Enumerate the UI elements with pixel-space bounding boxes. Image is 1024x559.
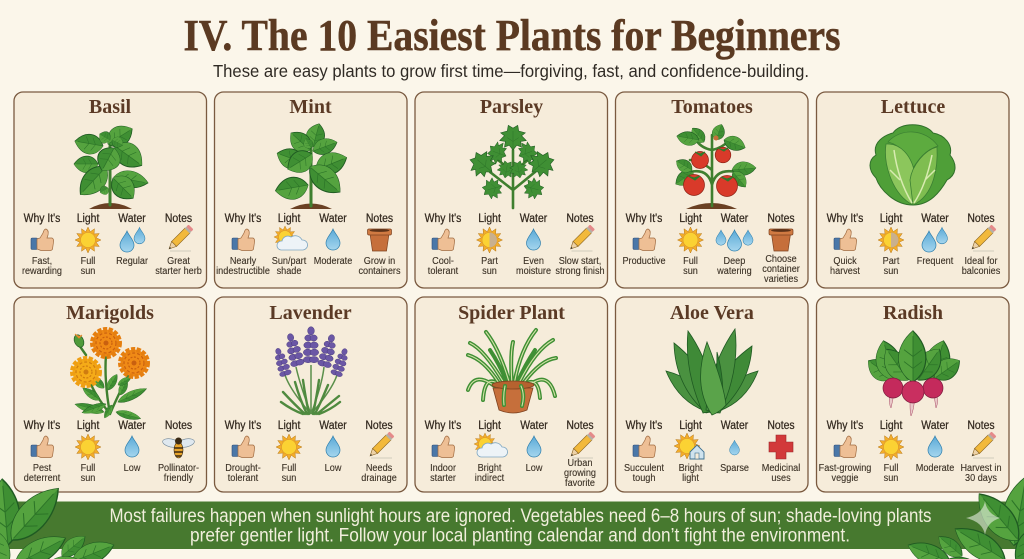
column: Notes	[564, 419, 596, 489]
column: Light	[878, 212, 904, 277]
column: Notes	[358, 212, 401, 277]
panel: Parsley	[415, 92, 608, 288]
column: Water: Water	[921, 419, 949, 432]
column: Light: Light	[679, 212, 703, 225]
column: Water	[319, 419, 347, 474]
column: Why It's: tolerant	[428, 265, 458, 277]
column: Water: Water	[520, 212, 547, 225]
icon: drop	[527, 436, 541, 457]
column: Water	[716, 212, 753, 277]
panel: Radish	[816, 297, 1009, 492]
column: Why It's: Indoor	[430, 462, 456, 474]
column: Notes	[960, 419, 1002, 484]
column: Light	[678, 212, 704, 277]
icon: red cross	[769, 435, 793, 459]
column: Light: Light	[77, 419, 100, 432]
panel: Mint	[214, 92, 407, 288]
column: Notes: containers	[358, 265, 401, 277]
column: Light: Light	[679, 419, 703, 432]
column: Light: Light	[278, 212, 301, 225]
column: Water: Water	[721, 419, 748, 432]
column: Water: Water	[118, 212, 146, 225]
column: Water: Even	[523, 255, 544, 267]
column: Notes	[155, 212, 202, 277]
column: Why It's: Why It's	[225, 419, 262, 432]
column: Why It's: tough	[633, 472, 655, 484]
column: Notes: friendly	[164, 472, 193, 484]
column: Light: Full	[683, 255, 698, 267]
icon: bee	[162, 437, 195, 458]
column: Water	[916, 419, 955, 474]
corner leaves: left	[0, 478, 117, 559]
heading: Aloe Vera: Aloe Vera	[670, 302, 754, 324]
icon: small drop	[730, 440, 739, 455]
heading: Mint: Mint	[289, 96, 332, 118]
icon: sun	[75, 434, 101, 460]
column: Why It's: Fast,	[32, 255, 52, 267]
column: Notes	[361, 419, 397, 484]
icon: thumbs up	[232, 229, 255, 250]
column: Water: Deep	[724, 255, 745, 267]
icon: thumbs up	[633, 436, 656, 458]
plant: radish	[863, 331, 965, 416]
column: Light: Part	[481, 255, 498, 267]
column: Notes: Choose	[765, 253, 797, 265]
column: Notes: Notes	[365, 419, 393, 432]
column: Water	[314, 212, 353, 267]
column: Why It's: Why It's	[24, 419, 61, 432]
title: IV. The 10 Easiest Plants for Beginners	[184, 11, 840, 60]
column: Water: Low	[526, 462, 543, 474]
icon: sun	[276, 434, 302, 460]
column: Notes: growing	[564, 467, 596, 479]
column: Why It's: Cool-	[432, 255, 454, 267]
column: Light: Light	[77, 212, 100, 225]
icon: sun	[678, 227, 704, 253]
column: Why It's: deterrent	[24, 472, 61, 484]
icon: pot	[368, 229, 392, 251]
column: Water	[516, 212, 552, 277]
column: Why It's: indestructible	[216, 265, 270, 277]
column: Notes: Medicinal	[762, 462, 800, 474]
subtitle: These are easy plants to grow first time—forgiving, fast, and confidence-building.	[213, 61, 809, 81]
column: Notes: Notes	[165, 212, 192, 225]
icon: pencil	[167, 225, 193, 251]
column: Light	[75, 419, 101, 484]
column: Notes: Notes	[767, 212, 795, 225]
column: Why It's: tolerant	[228, 472, 258, 484]
heading: Spider Plant: Spider Plant	[458, 302, 565, 324]
column: Why It's	[22, 212, 62, 277]
column: Light: sun	[482, 265, 497, 277]
column: Why It's: Why It's	[626, 419, 663, 432]
icon: two drops	[922, 227, 947, 252]
panel: Basil	[14, 92, 206, 288]
icon: sun	[75, 227, 101, 253]
icon: part sun	[476, 227, 502, 253]
column: Light: sun	[81, 472, 95, 484]
column: Light	[674, 419, 704, 484]
column: Water: watering	[716, 265, 752, 277]
column: Light: Light	[478, 212, 502, 225]
plant: aloe vera	[666, 329, 758, 415]
column: Water: Sparse	[720, 462, 749, 474]
column: Notes: Notes	[566, 419, 594, 432]
icon: drop	[326, 436, 340, 457]
column: Light: light	[682, 472, 699, 484]
panel: Aloe Vera	[616, 297, 808, 492]
icon: pencil	[970, 225, 996, 251]
icon: three drops	[716, 230, 753, 251]
column: Notes: favorite	[565, 477, 595, 489]
column: Notes: Harvest in	[960, 462, 1002, 474]
column: Notes: uses	[771, 472, 791, 484]
column: Light: Full	[81, 462, 95, 474]
column: Notes: 30 days	[965, 472, 997, 484]
column: Why It's: Why It's	[827, 419, 864, 432]
column: Notes	[555, 212, 605, 277]
panel: Lavender	[214, 297, 407, 492]
column: Notes: drainage	[361, 472, 397, 484]
column: Notes	[962, 212, 1000, 277]
icon: part sun	[878, 227, 904, 253]
column: Water: Regular	[116, 255, 149, 267]
column: Why It's: starter	[430, 472, 457, 484]
column: Why It's	[425, 212, 462, 277]
column: Notes	[762, 419, 800, 484]
column: Why It's: Why It's	[626, 212, 663, 225]
heading: Lettuce: Lettuce	[881, 96, 945, 118]
icon: pencil	[368, 432, 394, 458]
panel: Spider Plant	[415, 297, 608, 492]
heading: Marigolds: Marigolds	[66, 302, 154, 324]
column: Why It's	[819, 419, 871, 484]
column: Why It's: Why It's	[827, 212, 864, 225]
panel: Lettuce	[816, 92, 1009, 288]
column: Why It's: harvest	[830, 265, 860, 277]
icon: pot	[769, 229, 793, 251]
panel: Tomatoes	[616, 92, 808, 288]
icon: sun	[878, 434, 904, 460]
column: Why It's	[624, 419, 664, 484]
icon: thumbs up	[633, 229, 656, 250]
column: Why It's	[425, 419, 462, 484]
icon: thumbs up	[232, 436, 255, 458]
icon: drop	[125, 436, 139, 457]
column: Water	[720, 419, 749, 474]
column: Why It's: veggie	[832, 472, 859, 484]
column: Light	[476, 212, 502, 277]
column: Light: Full	[81, 255, 95, 267]
column: Light: Sun/part	[272, 255, 306, 267]
icon: thumbs up	[432, 436, 455, 458]
icon: sun and cloud	[274, 226, 308, 250]
sparkle	[966, 501, 1000, 535]
column: Why It's: Fast-growing	[819, 462, 871, 474]
column: Water: Water	[721, 212, 748, 225]
icon: two drops	[120, 227, 145, 252]
column: Water: Low	[325, 462, 342, 474]
column: Why It's	[24, 419, 61, 484]
plant: lettuce	[870, 125, 955, 205]
column: Light: sun	[81, 265, 95, 277]
column: Light: sun	[884, 472, 898, 484]
column: Why It's: Productive	[622, 255, 666, 267]
column: Notes: balconies	[962, 265, 1000, 277]
heading: Parsley: Parsley	[480, 96, 543, 118]
column: Light: Light	[478, 419, 502, 432]
plant: mint	[274, 121, 350, 209]
column: Notes: Needs	[366, 462, 392, 474]
banner text: Most failures happen when sunlight hours are ignored. Vegetables need 6–8 hours of sun; shade-loving plants	[110, 506, 932, 527]
icon: thumbs up	[834, 229, 857, 250]
column: Light	[75, 212, 101, 277]
column: Notes: Notes	[566, 212, 594, 225]
column: Light: Bright	[478, 462, 501, 474]
column: Light: Full	[282, 462, 296, 474]
column: Notes: Urban	[568, 457, 592, 469]
plant: marigolds	[72, 330, 148, 422]
column: Notes: Slow start,	[559, 255, 601, 267]
column: Notes: varieties	[764, 273, 798, 285]
column: Light: Light	[278, 419, 301, 432]
column: Water: moisture	[516, 265, 552, 277]
column: Why It's: Why It's	[425, 212, 462, 225]
heading: Radish: Radish	[883, 302, 943, 324]
plant: parsley	[465, 125, 559, 208]
column: Why It's: Succulent	[624, 462, 664, 474]
heading: Lavender: Lavender	[269, 302, 352, 324]
column: Notes: Notes	[165, 419, 192, 432]
icon: pencil	[568, 225, 595, 251]
icon: drop	[928, 436, 942, 457]
column: Why It's: Why It's	[24, 212, 61, 225]
column: Why It's	[827, 212, 864, 277]
column: Light: Light	[880, 212, 903, 225]
column: Water: Moderate	[916, 462, 955, 474]
column: Light: sun	[884, 265, 898, 277]
column: Notes: Notes	[967, 212, 995, 225]
column: Why It's: rewarding	[22, 265, 62, 277]
column: Light: shade	[277, 265, 302, 277]
column: Water	[917, 212, 954, 267]
column: Why It's: Why It's	[425, 419, 462, 432]
column: Light	[878, 419, 904, 484]
column: Water: Water	[118, 419, 146, 432]
column: Why It's	[622, 212, 666, 267]
column: Water: Moderate	[314, 255, 353, 267]
panel: Marigolds	[14, 297, 206, 492]
column: Light	[474, 419, 508, 484]
column: Light: sun	[683, 265, 698, 277]
heading: Tomatoes: Tomatoes	[671, 96, 753, 118]
column: Light	[272, 212, 308, 277]
banner text: prefer gentler light. Follow your local planting calendar and don’t fight the environment.	[190, 526, 850, 546]
column: Notes: Great	[167, 255, 190, 267]
column: Light: indirect	[475, 472, 504, 484]
column: Water: Water	[319, 419, 347, 432]
icon: pencil	[569, 432, 595, 458]
column: Water	[118, 419, 146, 474]
column: Notes: Pollinator-	[158, 462, 199, 474]
plant: basil	[73, 120, 149, 209]
plant: spider plant	[468, 330, 556, 413]
column: Why It's	[216, 212, 270, 277]
icon: thumbs up	[31, 436, 54, 458]
column: Light: Bright	[679, 462, 702, 474]
icon: thumbs up	[834, 436, 857, 458]
column: Notes: container	[762, 263, 800, 275]
column: Notes: starter herb	[155, 265, 202, 277]
column: Light: Full	[884, 462, 898, 474]
column: Water: Low	[124, 462, 141, 474]
plant: lavender	[272, 327, 351, 414]
plant: tomatoes	[672, 122, 756, 209]
column: Notes: Notes	[967, 419, 995, 432]
corner leaves: right	[904, 474, 1024, 559]
heading: Basil: Basil	[89, 96, 132, 118]
column: Notes: strong finish	[555, 265, 605, 277]
icon: thumbs up	[432, 229, 455, 250]
column: Notes: Notes	[767, 419, 795, 432]
column: Notes: Ideal for	[965, 255, 997, 267]
column: Notes: Notes	[366, 212, 393, 225]
column: Water: Frequent	[917, 255, 954, 267]
column: Why It's: Nearly	[230, 255, 256, 267]
icon: sun and house	[674, 433, 704, 459]
column: Why It's: Quick	[833, 255, 857, 267]
column: Notes	[762, 212, 800, 285]
column: Why It's	[225, 419, 262, 484]
banner	[0, 502, 1024, 549]
column: Why It's: Pest	[33, 462, 51, 474]
column: Why It's: Why It's	[225, 212, 262, 225]
column: Light: Light	[880, 419, 903, 432]
column: Notes	[158, 419, 199, 484]
icon: sun and cloud	[474, 433, 508, 457]
column: Water	[520, 419, 548, 474]
column: Light	[276, 419, 302, 484]
column: Why It's: Drought-	[225, 462, 261, 474]
column: Water	[116, 212, 149, 267]
column: Water: Water	[520, 419, 548, 432]
icon: drop	[326, 229, 340, 250]
column: Notes: Grow in	[364, 255, 395, 267]
column: Water: Water	[921, 212, 949, 225]
icon: drop	[526, 229, 540, 250]
column: Light: Part	[883, 255, 899, 267]
column: Water: Water	[319, 212, 347, 225]
icon: thumbs up	[31, 229, 54, 250]
column: Light: sun	[282, 472, 296, 484]
icon: pencil	[970, 432, 996, 458]
